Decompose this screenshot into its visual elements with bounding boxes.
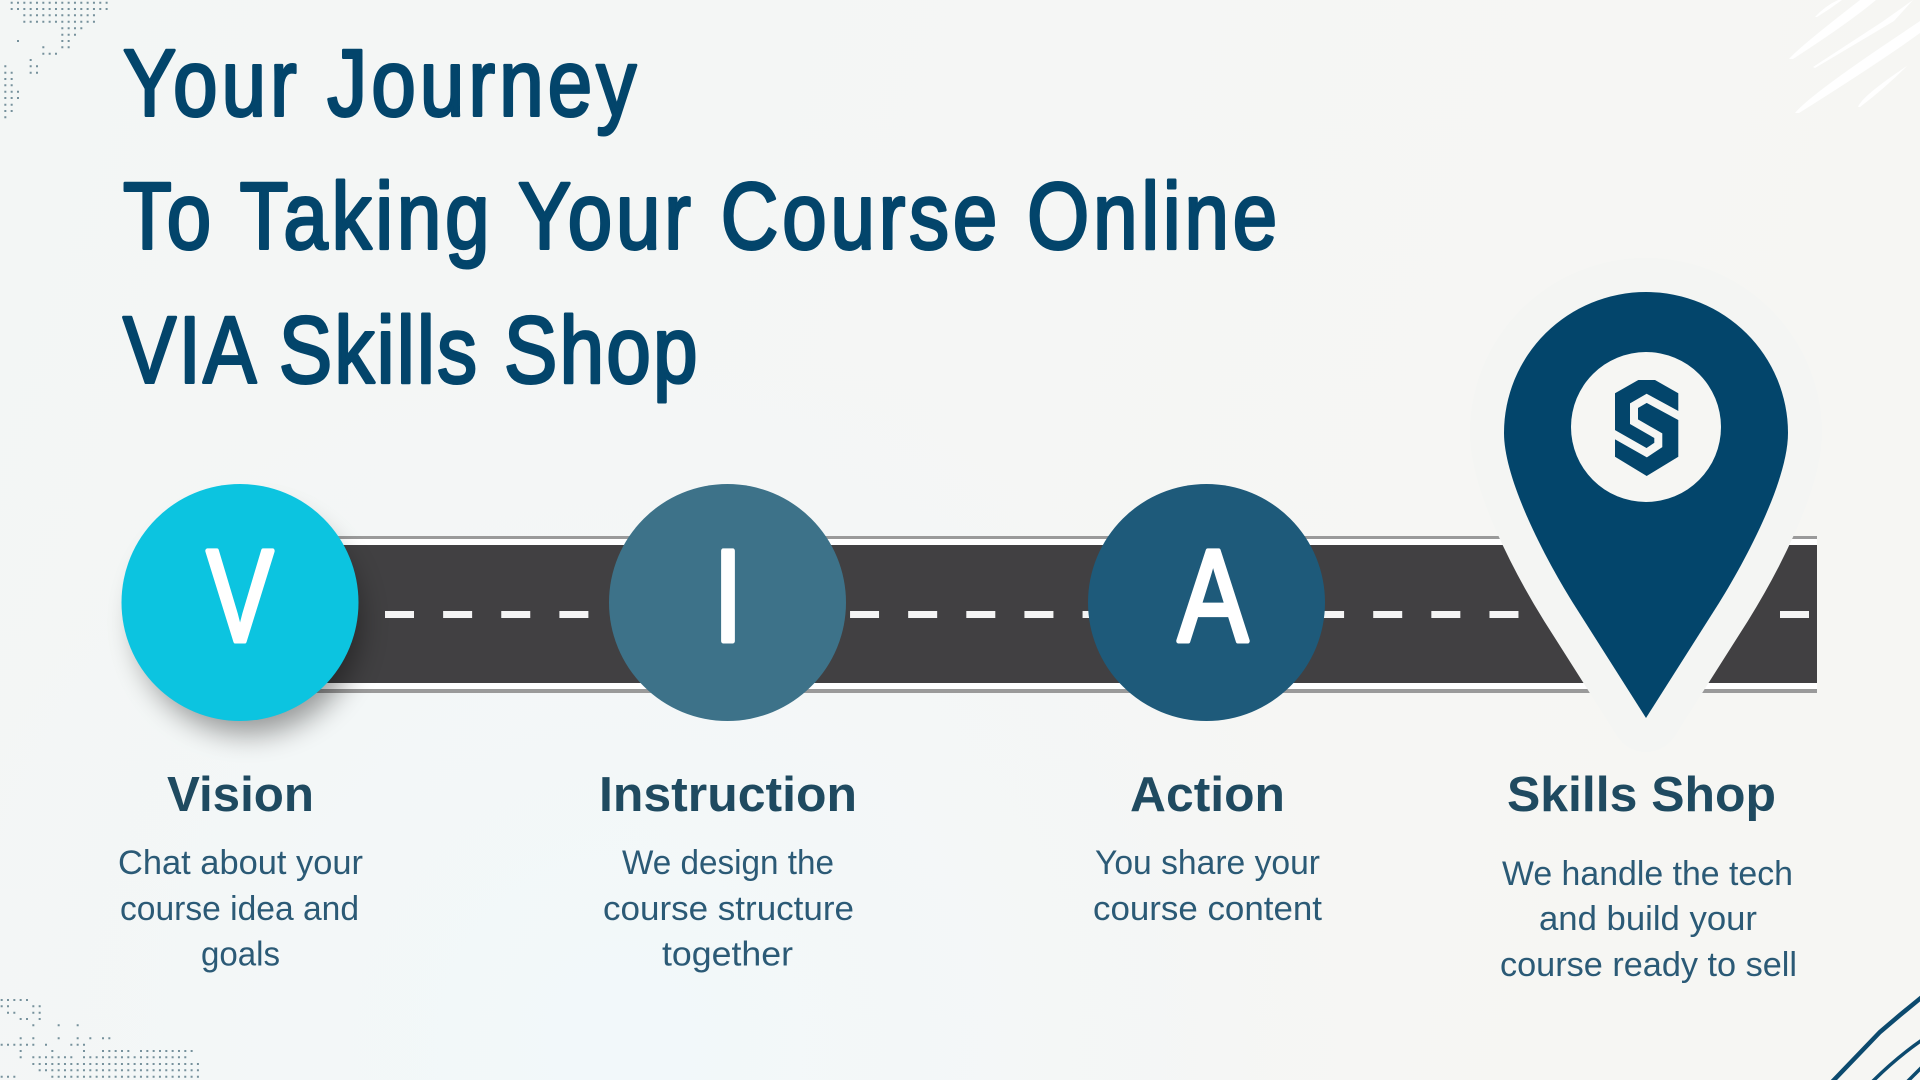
step: Skills Shop: and build your (1539, 900, 1757, 938)
decoration: dots top-left (0, 3, 108, 216)
title: VIA Skills Shop (123, 297, 698, 403)
step: Skills Shop: We handle the tech (1502, 855, 1793, 893)
decoration: dots bottom-left (1, 1000, 199, 1077)
step circle: I: I (713, 524, 743, 670)
map pin with logo (1504, 292, 1788, 718)
step: Action: You share your (1095, 844, 1320, 882)
step: Skills Shop: Skills Shop (1507, 768, 1776, 822)
title (123, 30, 1277, 403)
step: Action: Action (1130, 768, 1285, 822)
step: Vision: Vision (167, 768, 314, 822)
step: Instruction: together (662, 936, 793, 974)
step: Instruction: We design the (622, 844, 834, 882)
step: Skills Shop (1500, 768, 1797, 984)
step circle: V: V (207, 523, 274, 669)
step: Vision: Chat about your (118, 844, 363, 882)
step: Instruction: course structure (603, 890, 854, 928)
decoration: navy brush strokes bottom-right (1832, 997, 1920, 1080)
title: Your Journey (123, 30, 636, 136)
step: Action: course content (1093, 890, 1323, 928)
step: Action (1093, 768, 1323, 928)
step circle: I (609, 484, 846, 721)
step: Instruction (599, 768, 857, 974)
decoration: white brush strokes top-right (1789, 0, 1920, 113)
step: Vision (118, 768, 363, 974)
step: Instruction: Instruction (599, 768, 857, 822)
step: Vision: goals (201, 936, 280, 974)
step: Skills Shop: course ready to sell (1500, 946, 1797, 984)
step circle: A: A (1178, 524, 1248, 670)
road (300, 536, 1817, 693)
step circle: V (122, 484, 360, 734)
step circle: A (1088, 484, 1325, 721)
step: Vision: course idea and (120, 890, 359, 928)
title: To Taking Your Course Online (123, 163, 1277, 269)
